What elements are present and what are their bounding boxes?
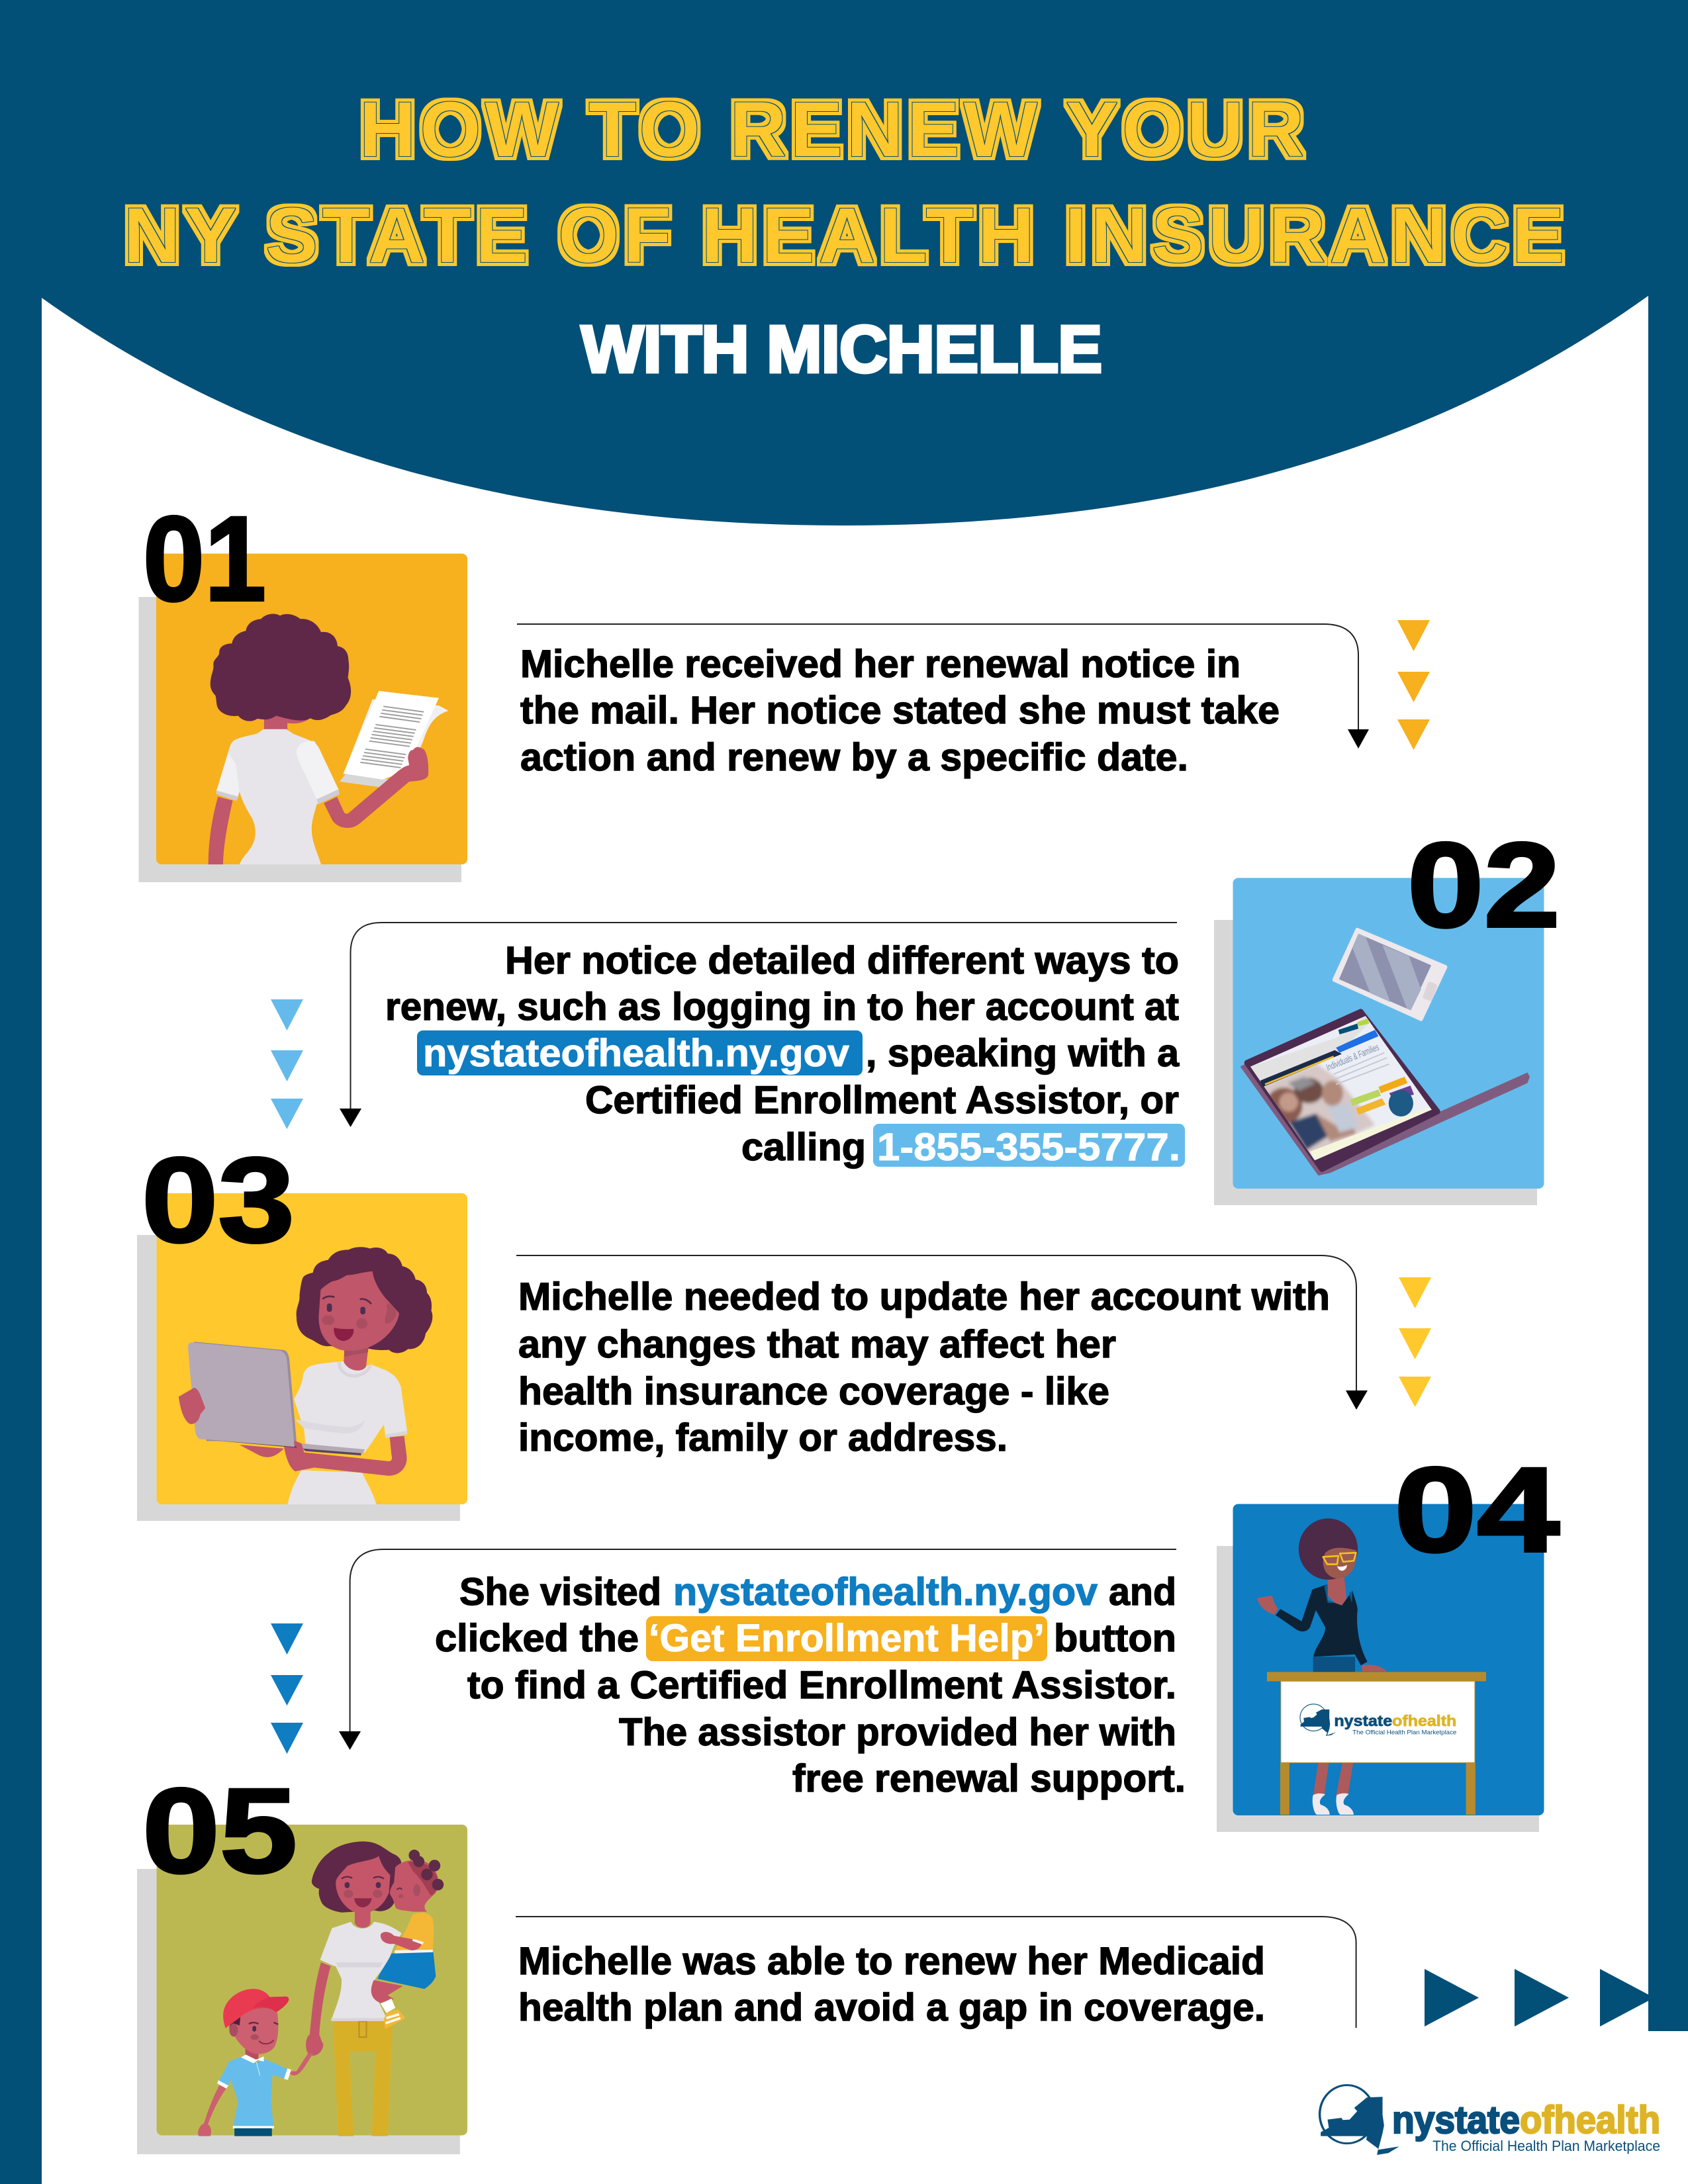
- title: NY STATE OF HEALTH INSURANCE: [124, 192, 1564, 279]
- text: step 1: action and renew by a specific date.: [520, 736, 1188, 779]
- desk logo: nystate: [1334, 1713, 1392, 1729]
- highlight: Get Enrollment Help: ‘Get Enrollment Help’: [649, 1617, 1045, 1660]
- text: step 2: [385, 939, 1185, 1169]
- arrows: step 1 triangles: [1397, 620, 1430, 750]
- number 03: 03: [142, 1132, 295, 1267]
- highlight: phone number: 1-855-355-5777.: [877, 1126, 1180, 1169]
- title: HOW TO RENEW YOUR: [359, 86, 1304, 173]
- text: step 4: The assistor provided her with: [619, 1711, 1176, 1754]
- arrow: step 3 connector: [516, 1255, 1368, 1410]
- text: step 1: Michelle received her renewal notice in: [520, 643, 1241, 686]
- logo tagline: The Official Health Plan Marketplace: [1432, 2138, 1660, 2154]
- subtitle: WITH MICHELLE: [581, 312, 1102, 387]
- logo icon: state map in circle: [1320, 2085, 1399, 2155]
- logo: NY State of Health: ofhealth: [1520, 2099, 1660, 2142]
- arrows: step 4 triangles: [271, 1623, 303, 1754]
- panel: step 2: [1214, 878, 1544, 1205]
- desk logo: The Official Health Plan Marketplace: [1352, 1729, 1456, 1737]
- logo: NY State of Health: [1320, 2085, 1660, 2155]
- text: step 1: [520, 643, 1280, 779]
- text: step 4: [435, 1570, 1186, 1800]
- illustration: phone and laptop with website: Individuals & Families: [1325, 1041, 1380, 1073]
- text: step 4: and: [1109, 1570, 1176, 1614]
- text: step 2: calling: [741, 1126, 866, 1169]
- text: step 4: nystateofhealth.ny.gov: [673, 1570, 1098, 1614]
- laptop website screen: [1250, 1016, 1433, 1160]
- text: step 5: [518, 1940, 1265, 2029]
- text: step 4: to find a Certified Enrollment Assistor.: [467, 1664, 1176, 1707]
- text: step 4: free renewal support.: [792, 1757, 1186, 1800]
- number 05: 05: [142, 1763, 297, 1898]
- number 02: 02: [1407, 817, 1560, 952]
- highlight: website link: nystateofhealth.ny.gov: [423, 1032, 849, 1075]
- connector: step 5 line: [516, 1917, 1356, 2028]
- panel: step 3: [137, 1193, 467, 1521]
- illustration: woman reading notice from behind: [209, 614, 449, 864]
- desk logo: ofhealth: [1392, 1713, 1456, 1729]
- arrows: step 5 triangles: [1425, 1969, 1654, 2026]
- text: step 3: any changes that may affect her: [518, 1323, 1116, 1366]
- text: step 3: health insurance coverage - like: [518, 1370, 1109, 1413]
- text: step 5: Michelle was able to renew her Medicaid: [518, 1940, 1265, 1983]
- text: step 1: the mail. Her notice stated she must take: [520, 689, 1280, 732]
- illustration: phone and laptop with website: [1241, 930, 1530, 1175]
- text: step 4: clicked the: [435, 1617, 639, 1660]
- number 04: 04: [1394, 1442, 1560, 1577]
- illustration: mother with two children: [198, 1841, 444, 2136]
- arrow: step 4 connector: [339, 1549, 1176, 1750]
- number 01: 01: [143, 491, 266, 626]
- text: step 2: Her notice detailed different ways to: [505, 939, 1179, 982]
- illustration: enrollment assistor at desk: [1257, 1518, 1486, 1815]
- text: step 2: Certified Enrollment Assistor, or: [585, 1079, 1179, 1122]
- text: step 4: button: [1054, 1617, 1176, 1660]
- text: step 2: renew, such as logging in to her account at: [385, 985, 1179, 1028]
- arrow: step 2 connector: [340, 923, 1177, 1127]
- text: step 3: [518, 1275, 1330, 1459]
- text: step 3: income, family or address.: [518, 1416, 1008, 1459]
- panel: step 4: [1217, 1504, 1544, 1832]
- text: step 3: Michelle needed to update her account with: [518, 1275, 1330, 1318]
- text: step 4: She visited: [459, 1570, 661, 1614]
- arrows: step 3 triangles: [1399, 1277, 1431, 1407]
- illustration: woman with laptop: [179, 1247, 432, 1504]
- text: step 5: health plan and avoid a gap in coverage.: [518, 1986, 1265, 2029]
- arrow: step 1 connector: [517, 624, 1369, 749]
- logo wordmark: nystate: [1392, 2099, 1520, 2142]
- panel: step 5: [137, 1825, 467, 2154]
- title: [124, 86, 1564, 279]
- desk logo: [1300, 1704, 1456, 1737]
- panel: step 1: [139, 553, 467, 882]
- arrows: step 2 triangles: [271, 999, 303, 1129]
- text: step 2: , speaking with a: [866, 1032, 1180, 1075]
